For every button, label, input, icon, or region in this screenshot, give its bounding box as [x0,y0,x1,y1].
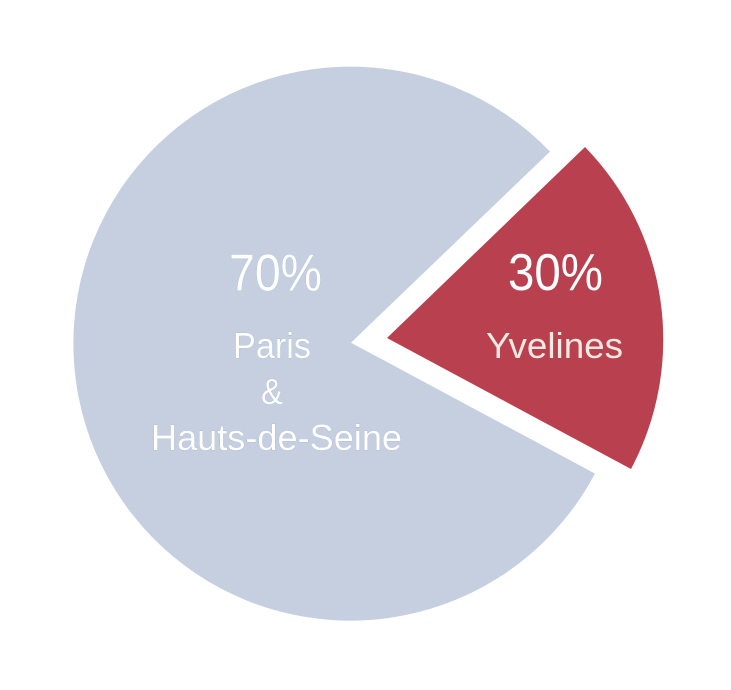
label: 70%: 70% [229,244,322,302]
label: Hauts-de-Seine: Hauts-de-Seine [151,417,402,458]
label: Paris: Paris [233,325,311,366]
slice: Yvelines 30% [387,147,663,469]
label: 30%: 30% [508,244,603,302]
slice: Paris and Hauts-de-Seine 70% [73,67,595,621]
label: Yvelines: Yvelines [486,325,623,366]
label: ampersand: & [261,371,283,412]
